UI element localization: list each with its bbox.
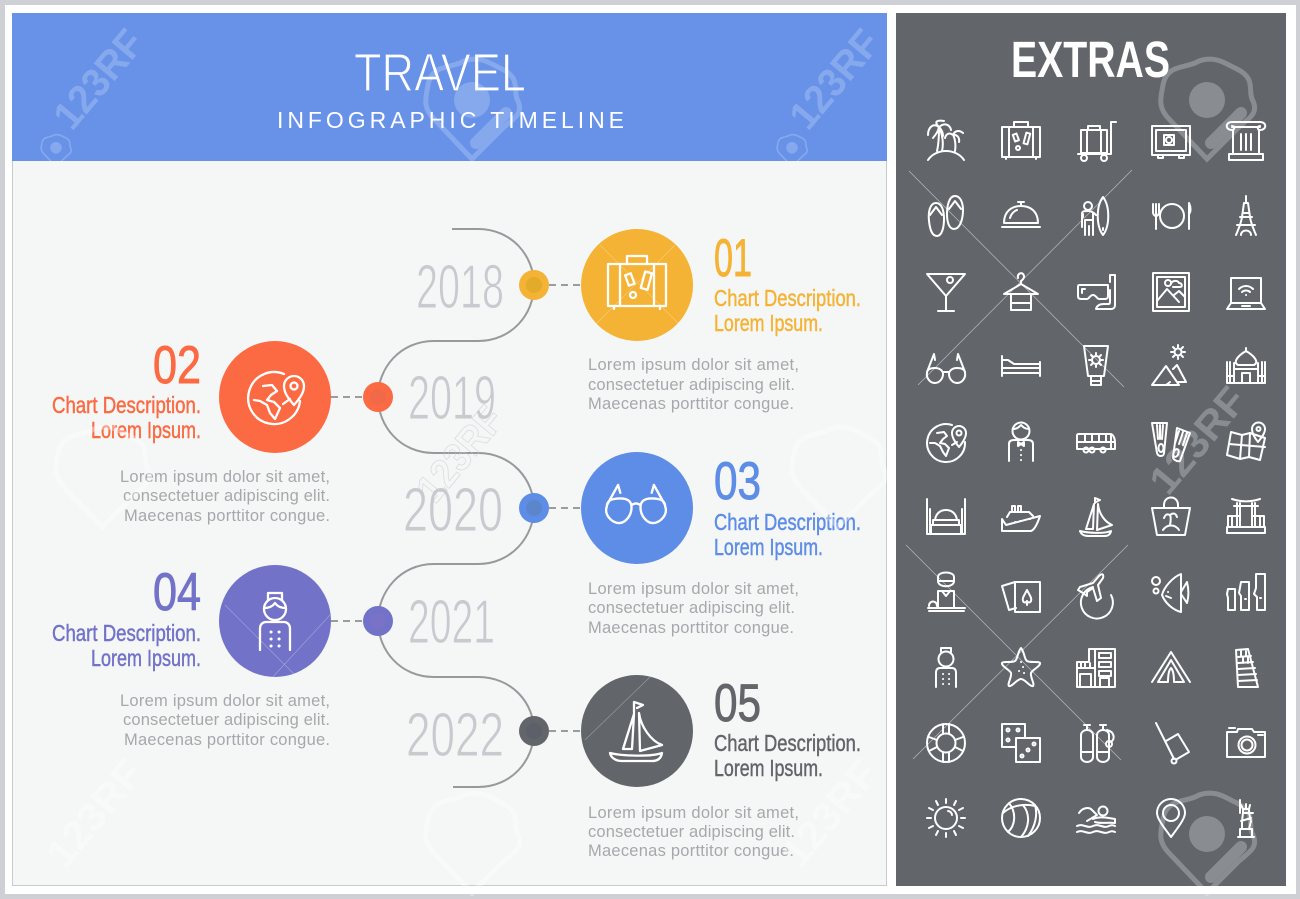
icon: bed xyxy=(1002,356,1040,376)
icon: plate and cutlery xyxy=(1153,203,1190,229)
icon: plane around globe xyxy=(1078,574,1113,619)
icon: leaning tower xyxy=(1236,649,1258,687)
icon: surfer with board xyxy=(1082,197,1108,235)
step 05: 05 xyxy=(714,674,761,733)
icon: martini xyxy=(927,274,965,311)
icon: starfish xyxy=(1002,648,1040,686)
icon: bellboy xyxy=(260,593,290,650)
icon: map with pin xyxy=(1227,422,1265,460)
icon: sailboat xyxy=(610,702,662,761)
step 01: Maecenas porttitor congue. xyxy=(588,395,794,413)
step 05: Maecenas porttitor congue. xyxy=(588,842,794,860)
extras icon grid xyxy=(927,121,1265,837)
icon: framed landscape xyxy=(1153,273,1189,311)
icon: swim fins xyxy=(1152,423,1190,461)
icon: palm island xyxy=(928,121,964,160)
year labels: 2019 xyxy=(408,364,496,433)
title: TRAVEL xyxy=(354,43,526,103)
timeline curve xyxy=(378,229,534,787)
icon: towel on hanger xyxy=(1004,273,1038,310)
step 04: Chart Description. xyxy=(52,620,201,646)
panel: timeline xyxy=(12,14,886,886)
icon: sun xyxy=(927,799,965,837)
step 05: Lorem ipsum dolor sit amet, xyxy=(588,804,799,822)
icon: snorkel mask xyxy=(1078,275,1115,309)
step 03: Lorem Ipsum. xyxy=(714,534,823,560)
watermark: 123RF marks: 123RF xyxy=(45,21,153,138)
step 05: Chart Description. xyxy=(714,730,861,756)
icon: safe xyxy=(1152,126,1190,158)
icon: tropical fish xyxy=(1152,574,1188,612)
icon: swimmer xyxy=(1077,806,1115,833)
step 04: consectetuer adipiscing elit. xyxy=(123,711,330,729)
icon: dice xyxy=(1002,724,1040,762)
icon: cruise ship xyxy=(1002,506,1040,531)
step 04: Lorem Ipsum. xyxy=(91,645,201,671)
icon: pyramids and sun xyxy=(1152,345,1186,385)
icon: food cloche xyxy=(1002,202,1040,227)
step 01 xyxy=(519,229,861,413)
icon: eiffel tower xyxy=(1236,196,1256,235)
step 02: Chart Description. xyxy=(52,392,201,418)
step 02 xyxy=(52,336,393,525)
icon: ionic column xyxy=(1227,122,1265,160)
step 04: 04 xyxy=(153,563,201,622)
icon: camera xyxy=(1227,728,1265,757)
watermark: 123RF marks: 123RF xyxy=(38,752,152,876)
step 01: 01 xyxy=(714,229,752,288)
watermark lines in circles xyxy=(225,245,680,740)
header banner xyxy=(12,13,887,161)
step 02: Lorem Ipsum. xyxy=(91,417,201,443)
icon: waiter xyxy=(1009,422,1033,461)
step 03 xyxy=(519,452,861,637)
icon: hotel building xyxy=(1077,649,1115,687)
icon: suitcase xyxy=(1002,122,1040,159)
step 02: Lorem ipsum dolor sit amet, xyxy=(120,468,330,486)
icon: beach ball xyxy=(1002,799,1040,837)
icon: sunglasses xyxy=(927,354,965,383)
panel: extras xyxy=(896,13,1286,886)
year labels: 2018 xyxy=(416,253,504,322)
icon: bellboy xyxy=(936,648,956,687)
step 03: consectetuer adipiscing elit. xyxy=(588,599,795,617)
step 04: Lorem ipsum dolor sit amet, xyxy=(120,692,330,710)
step 05: consectetuer adipiscing elit. xyxy=(588,823,795,841)
extras heading: EXTRAS xyxy=(1011,31,1170,88)
step 04 xyxy=(52,563,393,749)
step 03: Lorem ipsum dolor sit amet, xyxy=(588,580,799,598)
year labels: 2020 xyxy=(403,476,503,545)
icon: globe with pin xyxy=(927,424,966,462)
icon: location pin xyxy=(1157,799,1185,837)
step 03: Chart Description. xyxy=(714,509,861,535)
year labels: 2022 xyxy=(406,701,504,770)
icon: hotel receptionist xyxy=(928,572,965,611)
icon: moai statues xyxy=(1227,574,1265,610)
year labels xyxy=(403,253,504,770)
icon: torii gate xyxy=(1227,499,1265,533)
step 01: consectetuer adipiscing elit. xyxy=(588,376,795,394)
icon: sunscreen tube xyxy=(1084,346,1108,385)
step 01: Chart Description. xyxy=(714,285,861,311)
watermark: 123RF marks: 123RF xyxy=(1141,379,1255,503)
step 03: Maecenas porttitor congue. xyxy=(588,619,794,637)
subtitle: INFOGRAPHIC TIMELINE xyxy=(277,107,624,133)
icon: mosque xyxy=(927,499,965,534)
step 05: Lorem Ipsum. xyxy=(714,755,823,781)
watermark: 123RF marks: 123RF xyxy=(408,398,513,511)
icon: suitcase xyxy=(608,256,666,309)
step 01: Lorem ipsum dolor sit amet, xyxy=(588,356,799,374)
icon: playing cards xyxy=(1002,582,1040,612)
step 01: Lorem Ipsum. xyxy=(714,310,823,336)
step 05 xyxy=(519,674,861,860)
icon: globe with pin xyxy=(248,372,304,424)
watermark diagonal lines xyxy=(906,170,1132,760)
icon: beach bag xyxy=(1152,498,1190,535)
step 02: 02 xyxy=(153,336,201,395)
year labels: 2021 xyxy=(408,588,495,657)
icon: sailboat xyxy=(1080,498,1112,536)
icon: trolley suitcase xyxy=(1156,723,1189,764)
icon: laptop wifi xyxy=(1227,278,1265,309)
icon: tent xyxy=(1152,652,1190,682)
icon: flip flops xyxy=(929,196,963,236)
icon: life ring xyxy=(927,724,965,762)
step 03: 03 xyxy=(714,452,761,511)
step 02: Maecenas porttitor congue. xyxy=(124,507,330,525)
icon: bus xyxy=(1077,434,1115,452)
icon: taj mahal xyxy=(1227,348,1265,383)
step 02: consectetuer adipiscing elit. xyxy=(123,487,330,505)
icon: glasses xyxy=(606,485,666,523)
watermark: 123RF marks: 123RF xyxy=(773,752,887,876)
icon: scuba tanks xyxy=(1081,725,1114,762)
icon: statue of liberty xyxy=(1238,800,1254,837)
watermark: 123RF marks: 123RF xyxy=(781,21,889,138)
step 04: Maecenas porttitor congue. xyxy=(124,731,330,749)
icon: luggage cart xyxy=(1078,122,1116,161)
